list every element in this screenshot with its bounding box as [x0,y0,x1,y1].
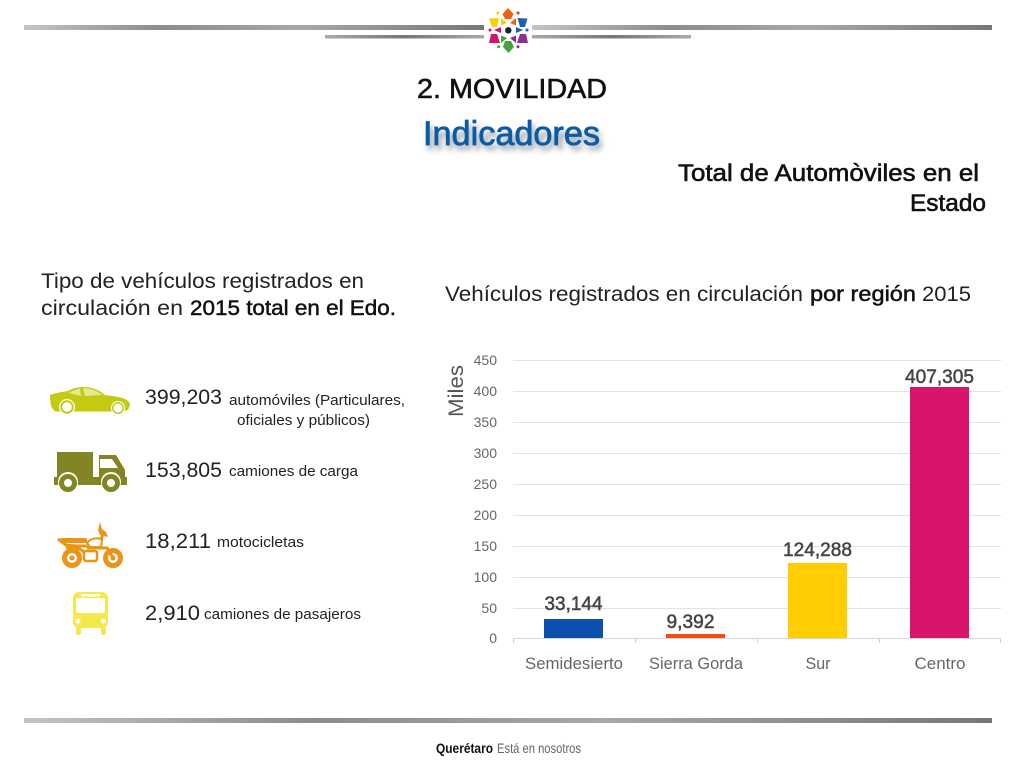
value labels: 9,392 [666,612,714,633]
heading: total de automoviles: Total de Automòviles en el [678,160,979,187]
heading: section title: 2. MOVILIDAD [417,73,607,104]
text: motocicletas [145,529,304,553]
y axis labels [474,352,497,646]
text: camiones de carga: camiones de carga [229,463,359,480]
text: automoviles: 399,203 [145,385,222,409]
text: automoviles [145,385,405,429]
value labels: 407,305 [905,367,974,388]
y axis labels: 450 [474,352,497,368]
bar chart: vehicles by region [445,352,1001,673]
header decorative bars [24,25,992,38]
icon: bus [73,592,108,635]
y axis labels: 400 [474,383,497,399]
text: right panel heading: por región [810,282,916,306]
heading: total de automoviles [678,160,986,217]
heading: Indicadores: Indicadores [426,120,603,158]
y axis labels: 0 [489,630,497,646]
y axis labels: 350 [474,414,497,430]
y axis labels: 50 [481,600,497,616]
y axis labels: 250 [474,476,497,492]
icon: truck [54,452,127,492]
category labels: Semidesierto [525,654,623,673]
text: automoviles: oficiales y públicos) [237,412,370,429]
y axis labels: 100 [474,569,497,585]
text: left panel heading [41,269,396,320]
bars [544,619,603,638]
value labels: 33,144 [544,594,603,615]
text: motocicletas: 18,211 [145,529,211,553]
text: camiones de pasajeros: camiones de pasajeros [204,606,361,623]
text: right panel heading: 2015 [922,282,971,306]
text: right panel heading: Vehículos registrados en circulación [445,282,803,306]
heading: total de automoviles: Estado [910,190,986,217]
footer text: Está en nosotros [497,740,581,756]
category labels [525,654,966,673]
icon: motorcycle [58,522,120,566]
text: camiones de carga: 153,805 [145,458,222,482]
footer text: Querétaro [436,740,493,756]
icon: Querétaro star logo [488,8,528,53]
text: left panel heading: Tipo de vehículos registrados en [41,269,364,293]
text: automoviles: automóviles (Particulares, [229,392,405,409]
text: camiones de pasajeros: 2,910 [145,601,200,625]
text: left panel heading: 2015 total en el Edo. [190,296,396,320]
heading: Indicadores: Indicadores [423,115,600,153]
text: right panel heading [445,282,971,306]
text: motocicletas: motocicletas [217,534,304,551]
value labels [544,367,974,633]
category labels: Sierra Gorda [649,654,744,673]
footer text [436,740,581,756]
footer decorative bar [24,718,992,723]
y axis labels: 150 [474,538,497,554]
category labels: Centro [914,654,966,673]
text: camiones de carga [145,458,359,482]
y axis labels: 200 [474,507,497,523]
text: left panel heading: circulación en [41,296,183,320]
category labels: Sur [806,654,831,673]
value labels: 124,288 [783,540,852,561]
text: camiones de pasajeros [145,601,361,625]
icon: car [50,387,130,415]
y axis title: Miles [445,365,468,417]
y axis labels: 300 [474,445,497,461]
